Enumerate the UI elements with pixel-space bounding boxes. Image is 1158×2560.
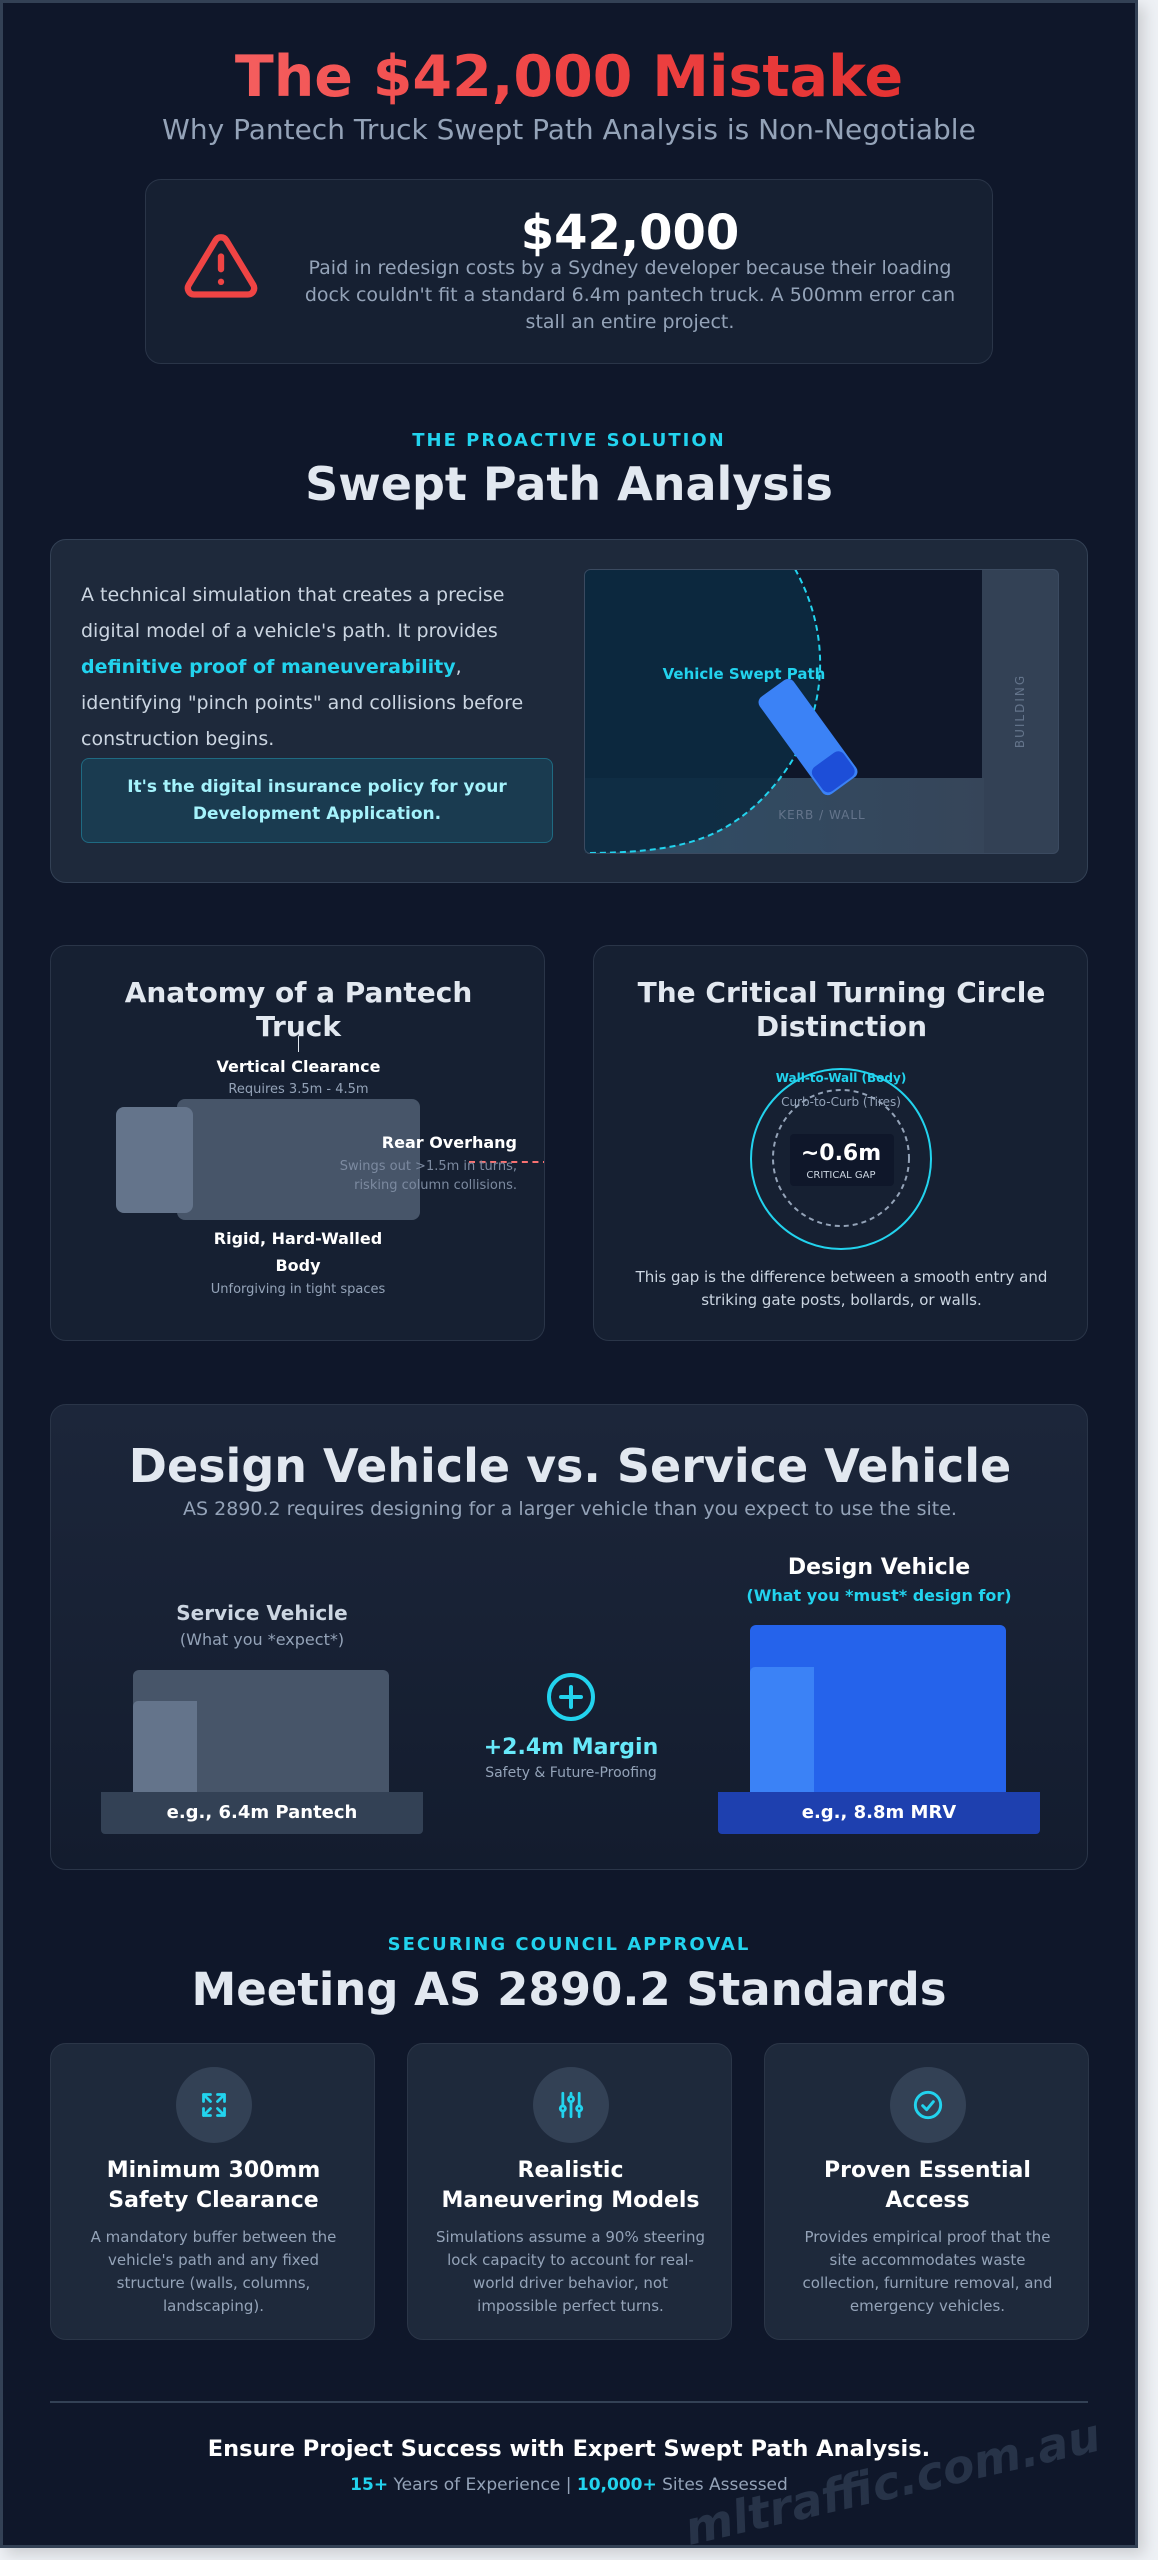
label: kerb: KERB / WALL: [778, 808, 866, 822]
heading: Anatomy of a Pantech Truck: [125, 976, 472, 1043]
section label: SECURING COUNCIL APPROVAL: [388, 1934, 750, 1955]
callout: [81, 758, 553, 843]
dashed overhang line: [469, 1161, 549, 1163]
stat text: Paid in redesign costs by a Sydney developer because their loading dock couldn't fit a standard 6.4m pantech truck. A 500mm error can stall an entire project.: [305, 257, 955, 333]
panel: design vs service: [50, 1404, 1088, 1870]
title: The $42,000 Mistake: [235, 44, 903, 110]
label: vertical clearance: [216, 1057, 380, 1097]
label: rear overhang: Rear Overhang: [382, 1133, 517, 1152]
panel: swept path intro: [50, 539, 1088, 883]
truck body: [177, 1099, 420, 1220]
heading: standards: Meeting AS 2890.2 Standards: [192, 1963, 946, 2016]
diagram: [584, 569, 1059, 854]
truck cab: [116, 1107, 193, 1213]
icon: expand: [176, 2067, 252, 2143]
card: maneuvering: Simulations assume a 90% steering lock capacity to account for real-world driver behavior, not impossible perfect turns.: [436, 2228, 705, 2315]
panel: anatomy: [50, 945, 545, 1341]
card: access: Provides empirical proof that the site accommodates waste collection, furniture removal, and emergency vehicles.: [803, 2228, 1052, 2315]
design vehicle: [718, 1555, 1040, 1834]
subtitle: Why Pantech Truck Swept Path Analysis is Non-Negotiable: [162, 113, 976, 146]
circle diagram: [750, 1068, 932, 1250]
label: building: BUILDING: [1013, 674, 1027, 748]
service vehicle: Service Vehicle: [176, 1601, 348, 1625]
text block: A technical simulation that creates a precise digital model of a vehicle's path. It provides definitive proof of maneuverability, identifying "pinch points" and collisions before construction begins.: [81, 584, 523, 750]
service vehicle: [101, 1601, 423, 1834]
label: vertical clearance: Vertical Clearance: [216, 1057, 380, 1076]
label: rear overhang: Swings out >1.5m in turns,: [340, 1159, 517, 1174]
card: access: [764, 2043, 1089, 2340]
title: [0, 42, 1138, 112]
icon: truck: [756, 676, 860, 798]
stat number: $42,000: [521, 205, 739, 261]
icon: warning: [184, 234, 258, 298]
stat box: [145, 179, 993, 364]
circle diagram: Wall-to-Wall (Body): [776, 1071, 906, 1085]
card: clearance: Minimum 300mm Safety Clearance: [107, 2158, 320, 2213]
footer stats: 15+ Years of Experience | 10,000+ Sites Assessed: [350, 2475, 788, 2495]
section label: THE PROACTIVE SOLUTION: [412, 430, 726, 451]
heading: swept path: Swept Path Analysis: [305, 457, 833, 511]
margin indicator: Safety & Future-Proofing: [485, 1765, 657, 1781]
caption: This gap is the difference between a smooth entry and striking gate posts, bollards, or walls.: [636, 1268, 1047, 1309]
design vehicle: e.g., 8.8m MRV: [802, 1802, 956, 1823]
circle diagram: ~0.6m: [801, 1141, 881, 1166]
footer: Ensure Project Success with Expert Swept Path Analysis.: [208, 2436, 930, 2462]
margin indicator: [484, 1673, 658, 1781]
label: rear overhang: [340, 1133, 517, 1193]
label: rear overhang: risking column collisions.: [354, 1178, 517, 1193]
icon: check: [890, 2067, 966, 2143]
card: clearance: [50, 2043, 375, 2340]
design vehicle: Design Vehicle: [788, 1555, 970, 1580]
service vehicle: (What you *expect*): [180, 1630, 344, 1649]
label: rigid body: Rigid, Hard-Walled Body: [214, 1229, 382, 1275]
icon: sliders: [533, 2067, 609, 2143]
heading: The Critical Turning Circle Distinction: [638, 976, 1045, 1043]
card: access: Proven Essential Access: [824, 2158, 1031, 2213]
subtitle: AS 2890.2 requires designing for a larger vehicle than you expect to use the site.: [183, 1498, 957, 1520]
heading: Design Vehicle vs. Service Vehicle: [129, 1439, 1011, 1493]
service vehicle: e.g., 6.4m Pantech: [167, 1802, 357, 1823]
card: maneuvering: Maneuvering Models: [441, 2188, 700, 2213]
card: maneuvering: Realistic: [518, 2158, 623, 2183]
margin indicator: +2.4m Margin: [484, 1735, 658, 1760]
callout: It's the digital insurance policy for your Development Application.: [127, 777, 507, 824]
label: rigid body: Unforgiving in tight spaces: [211, 1282, 385, 1297]
design vehicle: (What you *must* design for): [746, 1586, 1012, 1605]
circle diagram: CRITICAL GAP: [806, 1170, 876, 1181]
label: rigid body: [211, 1229, 385, 1297]
label: vehicle swept path: Vehicle Swept Path: [663, 665, 825, 683]
label: vertical clearance: Requires 3.5m - 4.5m: [228, 1082, 369, 1097]
circle diagram: Curb-to-Curb (Tires): [781, 1095, 901, 1109]
card: clearance: A mandatory buffer between the vehicle's path and any fixed structure (walls, columns, landscaping).: [91, 2228, 336, 2315]
card: maneuvering: [407, 2043, 732, 2340]
panel: turning circle: [593, 945, 1088, 1341]
